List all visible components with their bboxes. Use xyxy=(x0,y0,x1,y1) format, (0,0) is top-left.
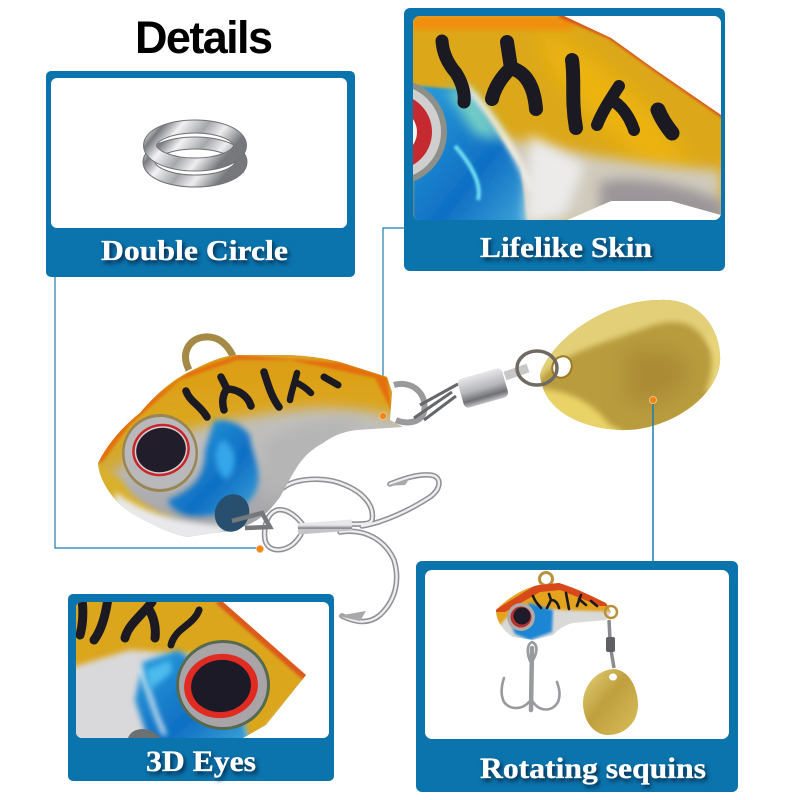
leader line: lifelike skin xyxy=(383,228,404,415)
panel: lifelike skin xyxy=(404,8,725,271)
title: Details xyxy=(135,12,273,63)
panel: 3D eyes xyxy=(68,594,334,781)
mini lure xyxy=(496,571,618,640)
leader line: rotating sequins xyxy=(652,400,654,561)
panel: rotating sequins xyxy=(416,561,738,792)
belly eyelet xyxy=(128,729,160,738)
lure stripes xyxy=(186,372,338,417)
marker dots xyxy=(256,396,657,553)
label: 3D eyes: 3D Eyes xyxy=(146,745,256,778)
mini treble hook xyxy=(502,642,560,710)
photo: eye close-up xyxy=(76,602,306,738)
hardware: snap and swivel xyxy=(414,367,528,420)
leader line: double circle xyxy=(55,277,260,548)
eye edge xyxy=(413,82,447,182)
stripes xyxy=(80,598,199,645)
hook: treble xyxy=(265,475,439,622)
stripes xyxy=(442,41,672,133)
mini swivel barrel xyxy=(606,637,615,652)
spinner blade xyxy=(515,300,720,430)
photo: skin close-up xyxy=(413,16,721,220)
lure: main body xyxy=(90,337,425,545)
label: double circle: Double Circle xyxy=(101,235,288,267)
lure top loop xyxy=(186,337,233,370)
label: lifelike skin: Lifelike Skin xyxy=(480,232,652,264)
mini swivel and chain xyxy=(609,620,614,668)
swivel ring through blade hole xyxy=(517,351,557,385)
eye xyxy=(176,640,270,730)
lure eye xyxy=(122,414,198,492)
lure belly eyelet xyxy=(209,489,255,537)
mini blade xyxy=(583,669,638,735)
label: rotating sequins: Rotating sequins xyxy=(480,752,706,785)
panel: double circle xyxy=(46,71,355,277)
icon: split ring xyxy=(149,126,244,181)
lure tail eyelet xyxy=(394,384,425,422)
